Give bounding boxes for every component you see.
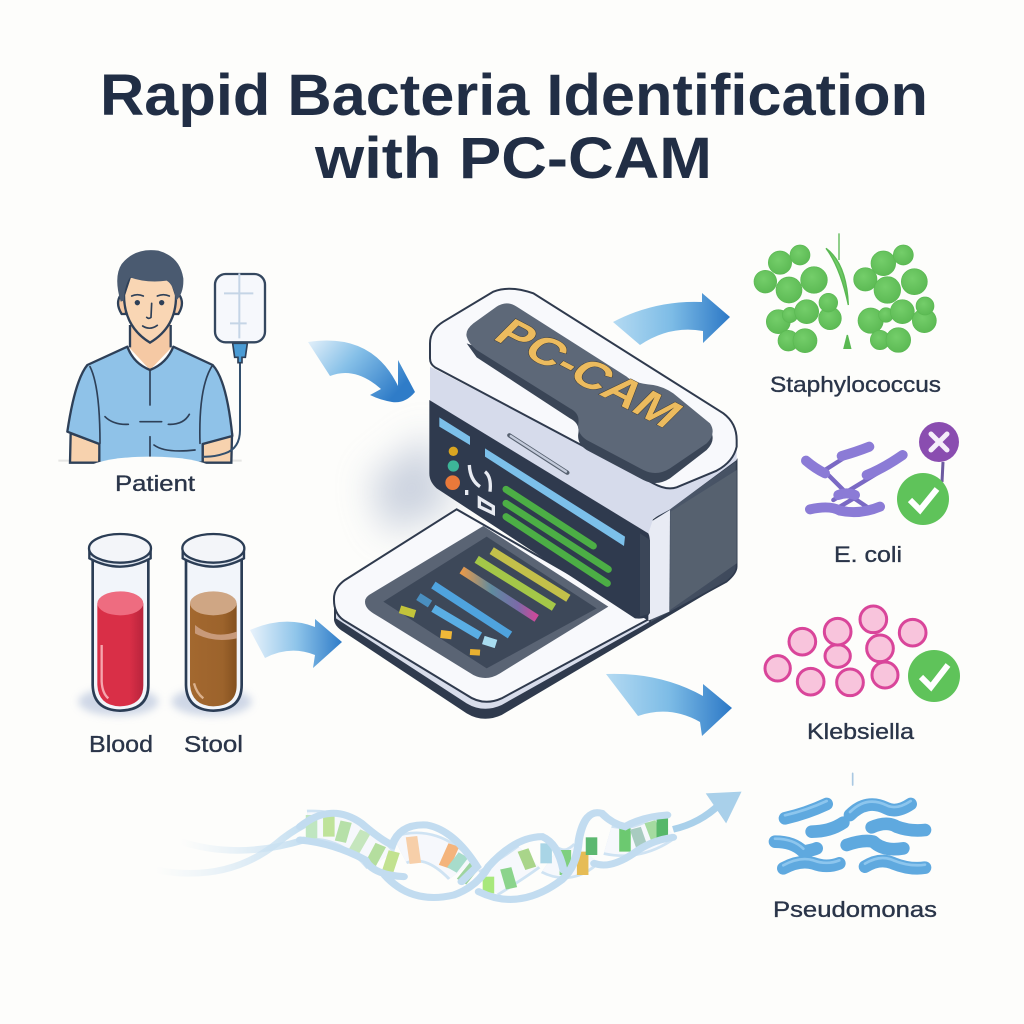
icon: green check badge [908,650,960,702]
title: with PC-CAM [314,126,712,191]
face features [132,295,169,328]
icon: purple cross badge [919,422,959,482]
patient shirt [67,347,232,463]
device: PC-CAM analyzer [334,289,737,719]
helix white core [308,825,665,883]
arrow: device to staphylococcus [613,293,730,345]
helix rungs [312,815,662,893]
front control panel [429,400,650,619]
arrow: patient to device [308,340,415,402]
neck sides [130,325,171,347]
front slot highlight [511,436,566,472]
shirt details [90,365,213,457]
front slot [509,435,567,473]
shirt hem cover [87,457,213,483]
DNA arrow [673,792,742,829]
top housing [430,289,737,488]
IV connector [233,343,247,363]
helix tails [156,825,304,873]
device shadow [370,433,453,533]
label: stool: Stool [184,731,243,757]
label: staphylococcus: Staphylococcus [770,372,941,397]
title [100,63,928,191]
stool tube [182,534,244,711]
icon: patient with IV bag [58,250,265,483]
device name: PC-CAM [485,311,693,436]
label plate [466,303,713,473]
base edge [334,567,737,719]
result bars [400,551,568,653]
bacteria: klebsiella [765,606,926,696]
lavender front band [430,367,737,533]
patient neck [130,323,171,370]
tube shadows [78,688,252,716]
blood tube [89,534,151,711]
IV tube [203,362,240,457]
right dark block [650,460,737,623]
label: pseudomonas: Pseudomonas [773,897,937,922]
result screen frame [365,526,608,678]
base side [336,605,650,709]
arrow: samples to device [250,619,342,668]
panel green bars [506,489,608,583]
white pillar [648,510,670,621]
label: blood: Blood [89,731,153,757]
label: klebsiella: Klebsiella [807,719,915,744]
arrow: device to klebsiella [606,674,732,736]
label: e. coli: E. coli [834,542,902,567]
bacteria: e. coli [806,447,903,512]
base top [334,509,648,702]
IV bag [215,274,265,342]
IV bag markings [224,273,253,338]
panel blue bars [439,417,625,546]
bacteria: staphylococcus cluster [754,233,936,353]
patient arms [70,433,232,463]
panel side strip [640,533,650,617]
panel indicator dots [445,447,493,513]
patient ears [118,295,182,314]
patient hair [117,250,183,302]
right inset panel [670,470,737,610]
patient face [124,277,176,343]
label plate shadow [467,343,713,483]
result screen [383,537,597,668]
title: Rapid Bacteria Identification [100,63,928,128]
bacteria: pseudomonas [775,773,925,868]
icon: green check badge [897,473,949,525]
label: patient: Patient [115,471,195,496]
helix strands [300,813,673,899]
icon: sample tubes [78,534,252,716]
DNA helix with arrow [156,792,742,899]
helix band edge [308,825,665,883]
